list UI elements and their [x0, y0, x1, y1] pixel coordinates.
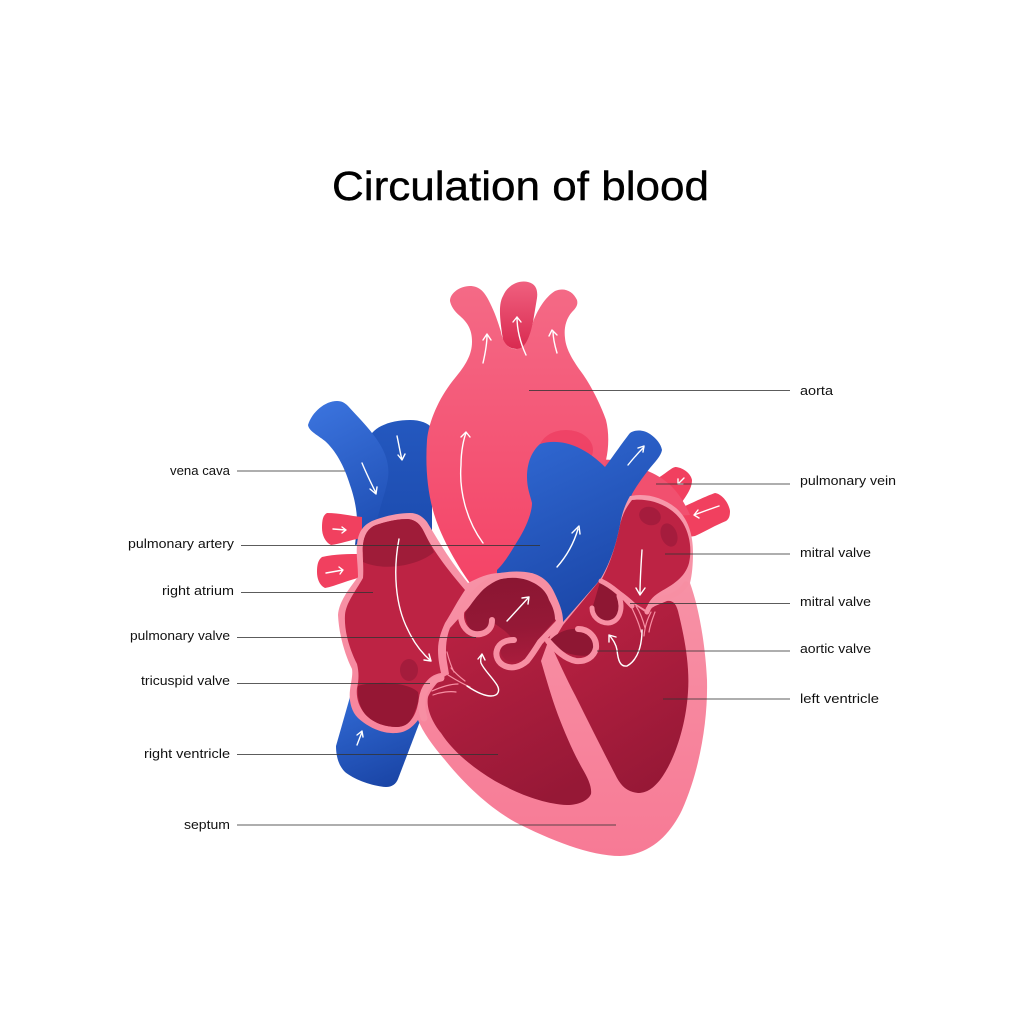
- label: right atrium: right atrium: [162, 583, 234, 598]
- title: Circulation of blood: [332, 163, 709, 209]
- vena cava upper: [308, 401, 432, 545]
- left atrium top: [600, 460, 690, 520]
- label: aorta: aorta: [800, 383, 834, 398]
- blood flow arrows: [326, 317, 719, 745]
- left atrium: [602, 500, 690, 610]
- pulmonary artery: [497, 430, 662, 624]
- right ventricle: [428, 585, 591, 805]
- label: mitral valve upper: mitral valve: [800, 545, 871, 560]
- label: septum: septum: [184, 817, 230, 832]
- pulmonary veins, right side: [317, 513, 362, 588]
- pulmonary veins, left side: [655, 467, 730, 540]
- label: vena cava: vena cava: [170, 463, 231, 478]
- tricuspid valve: [422, 652, 470, 718]
- inferior vena cava: [336, 697, 422, 787]
- pulmonary valve chamber: [461, 574, 560, 667]
- label: right ventricle: right ventricle: [144, 746, 230, 761]
- label: tricuspid valve: tricuspid valve: [141, 673, 230, 688]
- label: left ventricle: left ventricle: [800, 691, 879, 706]
- aortic valve: [548, 629, 596, 661]
- label: pulmonary valve: pulmonary valve: [130, 628, 230, 643]
- heart wall: [338, 495, 707, 856]
- label: mitral valve lower: mitral valve: [800, 594, 871, 609]
- right atrium: [345, 519, 465, 727]
- label: pulmonary artery: pulmonary artery: [128, 536, 235, 551]
- label: pulmonary vein: pulmonary vein: [800, 473, 896, 488]
- left ventricle: [551, 580, 688, 793]
- heart diagram: [308, 282, 730, 856]
- label: aortic valve: aortic valve: [800, 641, 871, 656]
- aorta: [426, 282, 608, 620]
- mitral valve: [592, 581, 686, 636]
